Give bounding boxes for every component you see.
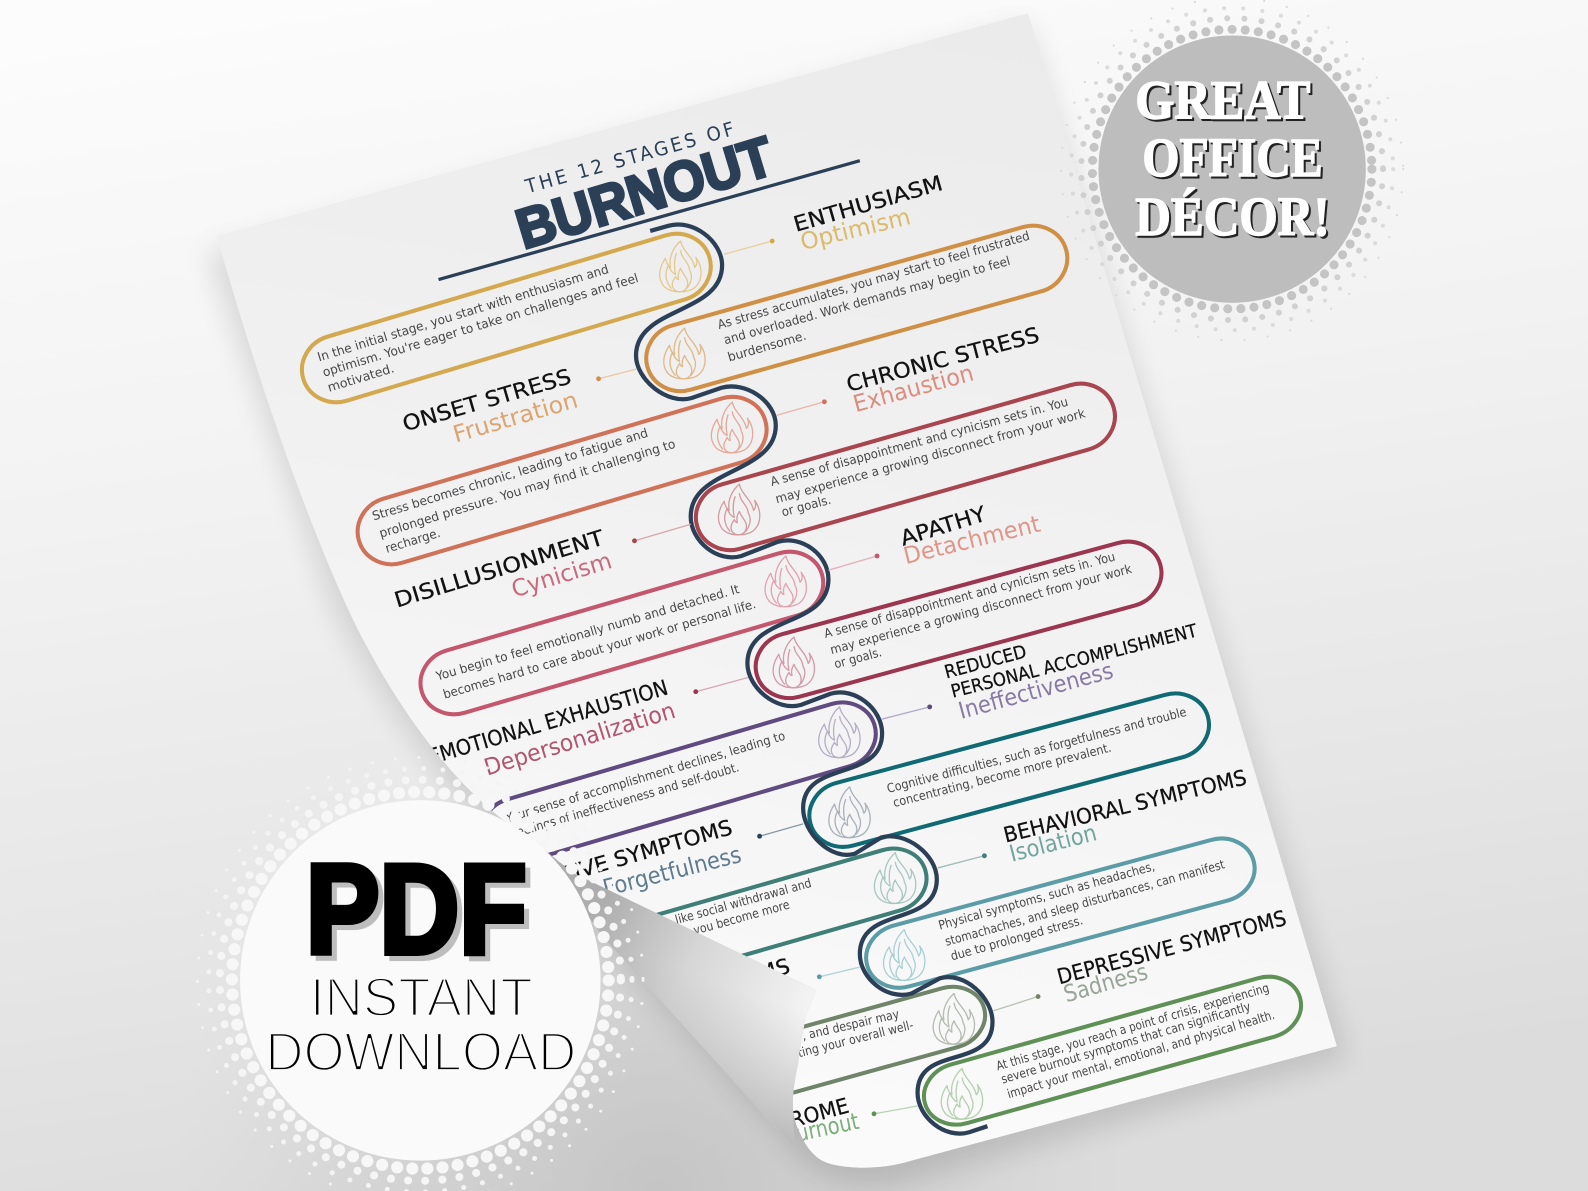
heading: apathy: Detachment <box>901 511 1043 570</box>
heading: reduced personal accomplishment: PERSONAL ACCOMPLISHMENT <box>949 620 1200 703</box>
instant download label <box>265 966 576 1082</box>
pill 2: onset stress: and overloaded. Work demands may begin to feel <box>722 253 1012 347</box>
heading: onset stress: ONSET STRESS <box>400 365 574 437</box>
heading: disillusionment: Cynicism <box>508 547 615 603</box>
pill 6: emotional exhaustion: A sense of disappointment and cynicism sets in. You <box>822 549 1117 641</box>
pill 12: burnout syndrome: severe burnout symptoms that can significantly <box>999 998 1253 1087</box>
pill 1: enthusiasm <box>294 225 719 411</box>
paper shadow <box>208 25 1347 1185</box>
leader 11 <box>994 994 1041 1011</box>
heading: emotional exhaustion: Depersonalization <box>481 697 679 782</box>
title: the 12 stages of: THE 12 STAGES OF <box>522 117 739 199</box>
heading: cognitive symptoms: Forgetfulness <box>600 841 744 902</box>
heading: reduced personal accomplishment: REDUCED <box>942 641 1029 683</box>
pill 10: physical symptoms <box>859 831 1262 996</box>
pill 6: emotional exhaustion: may experience a growing disconnect from your work <box>828 561 1134 657</box>
pill 1: enthusiasm: optimism. You're eager to take on challenges and feel <box>321 270 640 380</box>
pill 1: enthusiasm: In the initial stage, you start with enthusiasm and <box>316 261 610 364</box>
leader 1 <box>724 239 775 254</box>
panel: poster sheet <box>217 13 1337 1176</box>
badge: great office decor: GREAT <box>1135 69 1311 130</box>
heading: burnout syndrome: BURNOUT SYNDROME <box>630 1094 852 1176</box>
leader 10 <box>817 967 859 979</box>
pill 8: cognitive symptoms: concentrating, become more prevalent. <box>891 740 1113 810</box>
pill 11: depressive symptoms: , and despair may <box>800 1006 901 1043</box>
heading: cognitive symptoms <box>564 820 741 892</box>
instant download label: DOWNLOAD <box>265 1020 576 1082</box>
heading: onset stress: Frustration <box>450 387 581 448</box>
heading: burnout syndrome: Burnout <box>781 1108 861 1150</box>
pill 5: apathy: becomes hard to care about your work or personal life. <box>441 596 757 702</box>
pill 4: disillusionment: A sense of disappointment and cynicism sets in. You <box>769 394 1070 489</box>
leader 2 <box>596 369 636 381</box>
leader 8 <box>757 824 803 839</box>
pill 3: chronic stress: prolonged pressure. You may find it challenging to <box>377 436 677 541</box>
pill 7: reduced personal accomplishment: Your sense of accomplishment declines, leading to <box>503 728 787 825</box>
pill 9: behavioral symptoms: like social withdrawal and <box>673 875 813 927</box>
pill 1: enthusiasm: motivated. <box>326 360 396 395</box>
heading: cognitive symptoms: COGNITIVE SYMPTOMS <box>489 815 735 908</box>
pill 10: physical symptoms: stomachaches, and sleep disturbances, can manifest <box>943 856 1226 949</box>
heading: chronic stress: Exhaustion <box>850 360 977 418</box>
pill 7: reduced personal accomplishment: feelings of ineffectiveness and self-doubt. <box>511 759 741 840</box>
leader 4 <box>632 524 691 543</box>
heading: depressive symptoms: DEPRESSIVE SYMPTOMS <box>1055 906 1289 990</box>
pill 10: physical symptoms: due to prolonged stress. <box>949 912 1085 963</box>
pill 3: chronic stress <box>349 388 775 573</box>
pill 8: cognitive symptoms <box>802 686 1216 855</box>
pdf label: PDF <box>306 838 527 981</box>
heading: depressive symptoms: Sadness <box>1061 958 1151 1008</box>
pill 4: disillusionment: may experience a growing disconnect from your work <box>774 405 1087 506</box>
pill 12: burnout syndrome <box>917 969 1308 1133</box>
pill 5: apathy <box>413 543 831 723</box>
leader 5 <box>828 554 879 570</box>
heading: disillusionment: DISILLUSIONMENT <box>391 525 608 613</box>
badge: great office decor: OFFICE <box>1142 127 1323 188</box>
pill 6: emotional exhaustion <box>748 534 1169 706</box>
heading: physical symptoms: PHYSICAL SYMPTOMS <box>561 954 793 1042</box>
pill 2: onset stress: As stress accumulates, you may start to feel frustrated <box>716 228 1031 332</box>
page curl flap <box>527 836 816 1146</box>
pill 5: apathy: You begin to feel emotionally numb and detached. It <box>433 581 741 684</box>
title: burnout: BURNOUT <box>509 125 780 261</box>
pill 12: burnout syndrome: impact your mental, emotional, and physical health. <box>1005 1007 1276 1101</box>
heading: apathy: APATHY <box>897 502 990 552</box>
winding timeline path <box>636 225 992 1134</box>
pill 3: chronic stress: Stress becomes chronic, leading to fatigue and <box>370 425 650 523</box>
heading: emotional exhaustion: EMOTIONAL EXHAUSTION <box>425 676 671 770</box>
pill 9: behavioral symptoms: you become more <box>692 897 791 938</box>
title underline <box>439 161 860 280</box>
leader 7 <box>882 704 932 719</box>
pill 3: chronic stress: recharge. <box>383 525 442 556</box>
pill 10: physical symptoms: Physical symptoms, such as headaches, <box>937 858 1156 933</box>
leader 12 <box>872 1106 918 1116</box>
heading: behavioral symptoms: Isolation <box>1007 819 1100 868</box>
leader 9 <box>938 853 987 868</box>
pill 6: emotional exhaustion: or goals. <box>832 644 883 671</box>
badge: pdf instant download <box>197 758 643 1191</box>
pill 7: reduced personal accomplishment <box>491 700 878 856</box>
leader 3 <box>777 399 827 415</box>
heading: reduced personal accomplishment: Ineffectiveness <box>956 657 1116 725</box>
pill 4: disillusionment <box>688 375 1123 558</box>
leader 6 <box>693 678 748 694</box>
badge: great office decor: DÉCOR! <box>1135 186 1330 247</box>
badge: great office decor <box>1061 0 1403 340</box>
pill 2: onset stress: burdensome. <box>726 328 808 364</box>
heading: enthusiasm: Optimism <box>798 203 913 256</box>
pill 8: cognitive symptoms: Cognitive difficulties, such as forgetfulness and trouble <box>885 704 1188 796</box>
pill 11: depressive symptoms: ting your overall well- <box>796 1017 915 1060</box>
pill 12: burnout syndrome: At this stage, you reach a point of crisis, experiencing <box>994 980 1271 1073</box>
heading: chronic stress: CHRONIC STRESS <box>844 323 1042 398</box>
heading: behavioral symptoms: BEHAVIORAL SYMPTOMS <box>1001 766 1249 848</box>
pill 11: depressive symptoms <box>793 984 988 1095</box>
pill 9: behavioral symptoms <box>656 846 929 956</box>
pill 4: disillusionment: or goals. <box>780 492 833 519</box>
pill 2: onset stress <box>638 218 1075 399</box>
heading: enthusiasm: ENTHUSIASM <box>791 171 946 238</box>
instant download label: INSTANT <box>310 966 533 1028</box>
